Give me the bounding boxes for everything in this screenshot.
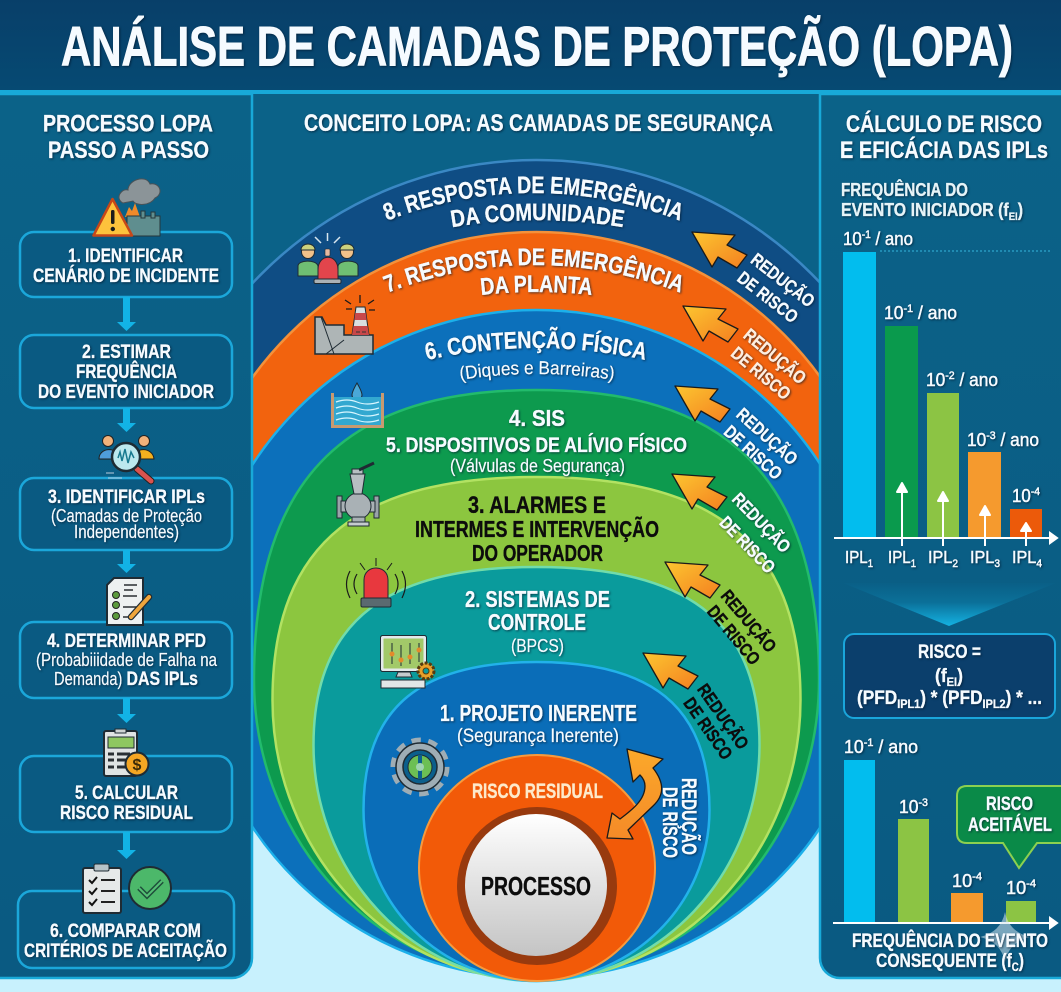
label: layer 3: INTERMES E INTERVENÇÃO [415,515,659,542]
bar 1 [844,760,875,922]
layer 7 ring [253,230,819,462]
label: layer 8: 8. RESPOSTA DE EMERGÊNCIA [383,176,683,222]
left heading: PROCESSO LOPA [43,110,213,138]
arrow: step 1 to 2 [117,297,136,331]
residual risk disc [419,755,655,981]
bar 2 [898,819,929,922]
consequent frequency label: C [1012,960,1019,974]
label: layer 8: DA COMUNIDADE [450,204,626,229]
step 2 box [20,335,232,408]
icon: plant with chimney [315,295,375,354]
arrow: step 5 to 6 [117,832,136,859]
right panel background [820,94,1061,978]
label: reduction 7: REDUÇÃO [740,324,811,388]
bar value labels: 10 [967,430,987,450]
bar value labels: 10 [844,737,864,757]
bar value labels: -4 [1026,878,1036,890]
icon: clipboard and check [83,864,171,913]
label: reduction 8: REDUÇÃO [747,249,819,311]
bar 3 [951,893,983,922]
axis [834,533,1057,543]
bar value labels: / ano [871,229,913,249]
step 3 box: (Camadas de Proteção [51,506,202,526]
label: layer 7: 7. RESPOSTA DE EMERGÊNCIA [382,248,684,295]
label: reduction 8 [734,249,819,327]
formula box: RISCO = [918,642,981,663]
icon: containment basin [332,383,382,426]
label: layer 2: CONTROLE [488,609,586,635]
arrow: reduction 2 [643,653,698,689]
label: layer 6 [425,326,647,385]
bar value labels: -3 [918,797,928,809]
bar value labels: -1 [904,303,913,315]
consequent frequency label: ) [1019,950,1024,972]
formula box: (PFD [857,688,901,709]
icon: inherent safety gear [394,741,446,793]
axis labels: 1 [868,558,873,570]
label: reduction 2: DE RISCO [679,694,736,763]
initiating event frequency label: EI [1009,211,1018,223]
arrow: reduction 1 double-headed [607,749,663,839]
label: layer 1: (Segurança Inerente) [457,726,619,747]
label: reduction 7: DE RISCO [727,343,794,404]
up arrows [897,483,1031,546]
label: process: PROCESSO [481,871,591,901]
step 5 box [20,756,232,832]
axis labels: IPL [970,547,996,567]
step 4 box: (Probabiiidade de Falha na [36,650,218,670]
label: layer 3 [415,492,659,566]
icon: calculator and coin [104,729,148,776]
step 3 box [20,478,232,550]
icon: incident warning and factory [94,179,160,236]
formula box: ) * (PFD [920,688,983,709]
axis labels: 1 [911,558,916,570]
step 6 box: 6. COMPARAR COM [50,920,201,942]
bar value labels: -1 [862,229,871,241]
panel: left process steps [0,94,252,978]
step 2 box: FREQUÊNCIA [76,359,177,383]
layer 8 ring [253,158,819,374]
arrow: reduction 8 [692,232,747,268]
bar value labels: / ano [996,430,1039,450]
axis labels: IPL [845,547,871,567]
icon: emergency crew and beacon [298,233,358,284]
panel: central concept [253,94,819,982]
sparkle [980,912,1030,962]
icon: team and magnifier [99,436,154,481]
label: reduction 7 [727,324,811,404]
label: reduction 5 [715,488,795,577]
label: reduction 1: DE RISCO [658,787,681,858]
label: reduction 3: DE RISCO [703,602,764,669]
label: reduction 6: REDUÇÃO [732,403,802,469]
header rule [0,90,1061,94]
layer 2 ring [314,567,760,981]
bar value labels: 10 [926,370,946,390]
step 5 box: 5. CALCULAR [75,782,178,804]
icon: calculator and coin: $ [133,757,142,774]
icon: control computer [380,636,434,688]
label: layer 3: DO OPERADOR [472,540,603,566]
arrow: step 4 to 5 [117,698,136,723]
left heading [43,110,213,164]
bar 3 [927,393,959,537]
callout: acceptable risk [957,786,1061,868]
bar chart: IPL frequency [834,229,1057,570]
label: layers 4 and 5: 5. DISPOSITIVOS DE ALÍVIO FÍSICO [386,432,687,457]
bar 4 [1006,901,1036,922]
right heading [840,110,1048,164]
label: layer 3: 3. ALARMES E [468,492,606,519]
axis labels: IPL [1012,547,1038,567]
formula box [844,634,1055,718]
step 1 box: CENÁRIO DE INCIDENTE [33,264,219,287]
icon: checklist and pencil [107,578,149,625]
chevron pointer [843,583,1056,626]
label: layers 4 and 5: 4. SIS [509,405,565,431]
bar value labels: -4 [972,871,982,883]
bar value labels [844,737,1036,898]
step 3 box: Independentes) [74,522,179,542]
icon: alarm beacon [346,558,406,607]
step 1 box: 1. IDENTIFICAR [68,245,183,267]
bar value labels: -2 [945,370,955,382]
axis labels: IPL [928,547,954,567]
arrow: reduction 6 [675,386,730,422]
bar chart: consequent frequency [833,737,1057,928]
initiating event frequency label: EVENTO INICIADOR (f [841,199,1036,220]
step 1 box [20,232,232,297]
label: layer 2: (BPCS) [511,635,564,656]
axis labels: 2 [952,558,958,570]
central heading: CONCEITO LOPA: AS CAMADAS DE SEGURANÇA [304,110,773,137]
formula box: IPL1 [897,697,921,711]
consequent frequency label: CONSEQUENTE (f [876,950,1045,972]
step 4 box: 4. DETERMINAR PFD [47,630,206,652]
bar 4 [968,452,1001,537]
axis labels [845,547,1042,570]
bar 1 [843,252,876,537]
step 2 box: DO EVENTO INICIADOR [38,381,214,403]
bar value labels: / ano [913,303,957,323]
label: layer 1 [440,700,637,747]
label: layer 7: DA PLANTA [480,274,594,298]
panel: right calculation [820,94,1061,978]
step 2 box: 2. ESTIMAR [82,341,171,363]
arrow: step 2 to 3 [117,408,136,432]
layer 3 ring [272,477,800,980]
consequent frequency label [852,928,1048,974]
initiating event frequency label [841,179,1023,223]
icon: relief valve [337,463,379,526]
bar 2 [885,326,918,537]
formula box: EI [947,675,957,689]
bar value labels: 10 [899,797,919,817]
process disc [465,814,607,956]
formula box: (f [935,666,948,687]
axis labels: 3 [994,558,1000,570]
label: layer 6: (Diques e Barreiras) [460,360,616,385]
label: layer 2: 2. SISTEMAS DE [465,586,610,612]
formula box: ) * ... [1006,688,1042,709]
arrow: reduction 3 [665,562,720,598]
step 3 box: 3. IDENTIFICAR IPLs [48,486,205,508]
layer 5 ring [254,390,819,978]
label: layer 6: 6. CONTENÇÃO FÍSICA [425,326,647,362]
label: layer 1: 1. PROJETO INERENTE [440,700,637,726]
label: residual risk: RISCO RESIDUAL [472,780,603,803]
label: layers 4 and 5 [386,405,687,476]
arrow: reduction 7 [683,306,738,342]
axis [833,918,1057,928]
bar value labels: -3 [986,430,996,442]
axis labels: IPL [888,547,914,567]
axis labels: 4 [1036,558,1042,570]
left panel background [0,94,252,978]
step 6 box: CRITÉRIOS DE ACEITAÇÃO [24,939,227,962]
initiating event frequency label: ) [1018,199,1023,220]
initiating event frequency label: FREQUÊNCIA DO [841,179,968,200]
process ring [457,807,617,965]
bar value labels: -4 [1031,486,1040,498]
formula box: ) [957,666,963,687]
bar value labels: -1 [864,737,873,749]
layer 6 ring [253,308,819,975]
bar value labels: 10 [1006,878,1026,898]
label: layer 2 [465,586,610,656]
bar value labels: / ano [873,737,918,757]
label: reduction 5: REDUÇÃO [728,488,795,557]
step 4 box [20,622,232,698]
bar value labels [843,229,1040,506]
header band [0,0,1061,91]
bar value labels: 10 [884,303,904,323]
left heading: PASSO A PASSO [48,137,209,164]
formula box: IPL2 [983,697,1006,711]
layer 1 ring [364,662,710,981]
bar value labels: / ano [955,370,998,390]
label: reduction 5: DE RISCO [715,512,779,577]
label: reduction 8: DE RISCO [734,268,802,327]
bar value labels: 10 [1012,486,1032,506]
label: reduction 1 [658,778,700,858]
label: reduction 2: REDUÇÃO [693,680,753,753]
bar value labels: 10 [952,871,972,891]
label: layers 4 and 5: (Válvulas de Segurança) [450,455,625,476]
bar value labels: 10 [843,229,863,249]
arrow: step 3 to 4 [117,550,136,573]
label: reduction 3: REDUÇÃO [717,585,781,656]
step 4 box: Demanda) DAS IPLs [54,668,198,690]
callout: acceptable risk: RISCO [986,794,1033,815]
step 5 box: RISCO RESIDUAL [60,802,193,824]
arrow: reduction 5 [672,474,727,510]
label: reduction 6: DE RISCO [720,421,786,484]
label: reduction 1: REDUÇÃO [677,778,700,855]
step 6 box [18,891,234,968]
bar 5 [1010,509,1042,537]
